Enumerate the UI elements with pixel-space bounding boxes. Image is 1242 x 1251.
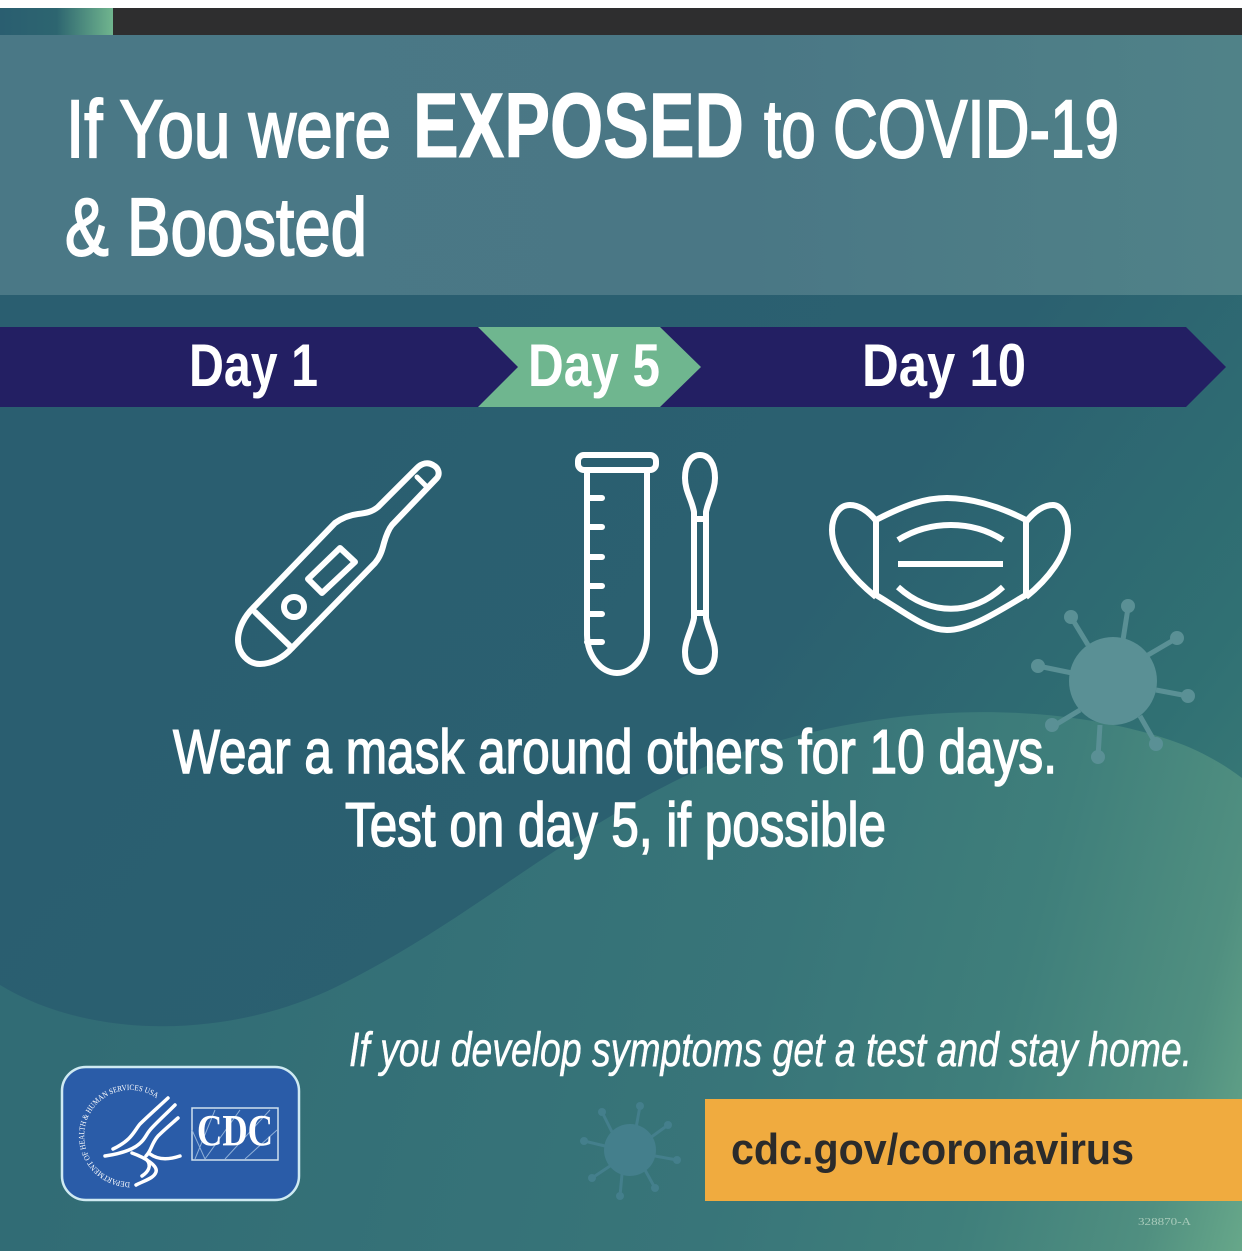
- title: & Boosted: [65, 182, 367, 273]
- title: to COVID-19: [764, 84, 1119, 175]
- body text: Test on day 5, if possible: [345, 791, 886, 860]
- timeline arrow: [0, 327, 1226, 407]
- seal text: DEPARTMENT OF HEALTH & HUMAN SERVICES USA: [78, 1084, 158, 1188]
- body text: [173, 718, 1057, 860]
- title: EXPOSED: [413, 75, 744, 177]
- cdc box: CDC: [197, 1106, 273, 1155]
- day labels: [189, 332, 1026, 399]
- header band: [0, 35, 1242, 295]
- title: [65, 75, 1119, 273]
- icon: mask: [832, 498, 1068, 630]
- icon: test tube: [578, 455, 656, 673]
- icon: virus small: [580, 1102, 681, 1200]
- icon: thermometer: [238, 463, 439, 664]
- document number: 328870-A: [1138, 1217, 1192, 1228]
- url banner: [705, 1099, 1242, 1201]
- eagle: [105, 1098, 180, 1185]
- icon: swab: [685, 455, 715, 672]
- day 5 highlight: [478, 327, 701, 407]
- day labels: Day 10: [862, 332, 1026, 399]
- top bar: [0, 8, 1242, 35]
- icon: virus large: [1031, 599, 1195, 764]
- day labels: Day 1: [189, 332, 318, 399]
- logo: HHS CDC: [60, 1066, 300, 1202]
- title: If You were: [66, 84, 391, 175]
- day labels: Day 5: [528, 332, 660, 399]
- url banner: cdc.gov/coronavirus: [731, 1125, 1134, 1174]
